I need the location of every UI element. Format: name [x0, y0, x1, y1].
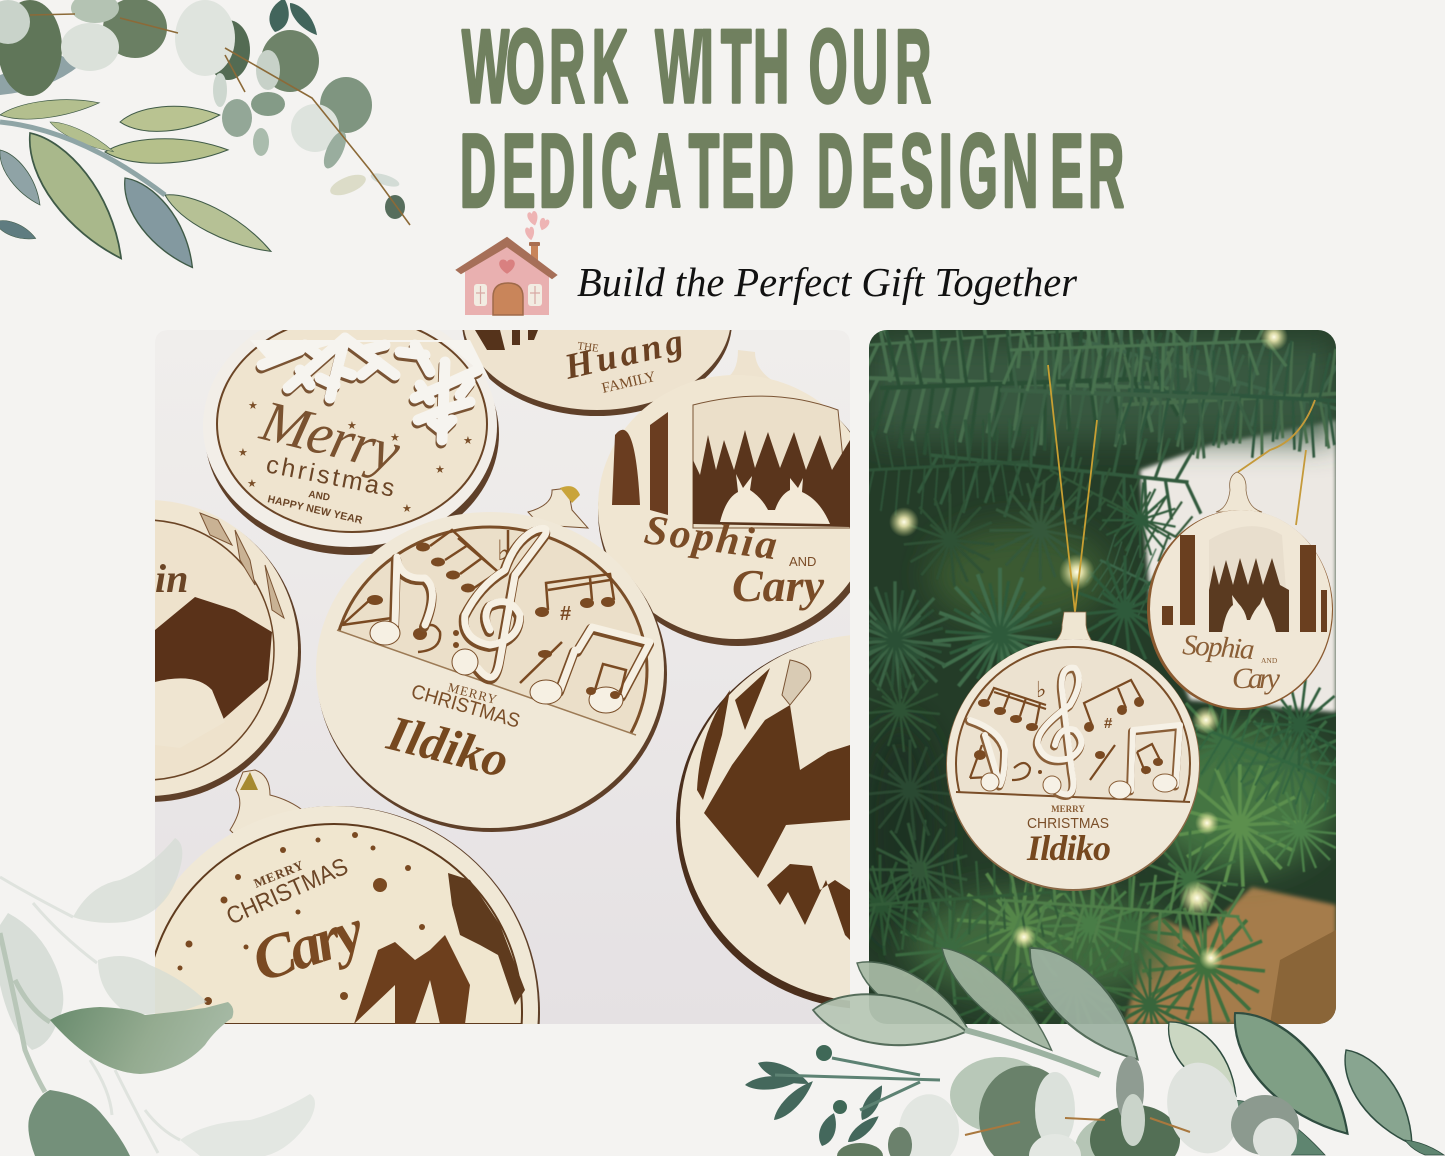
watercolor foliage: bottom-left corner [0, 838, 315, 1156]
window with forest scene [693, 396, 850, 528]
ornament: Sophia and Cary rabbits [598, 350, 878, 646]
stars: ★ [390, 431, 400, 444]
ornament: mountain and bear, left edge [155, 500, 301, 802]
ornament: Ildiko music notes, centre [316, 486, 667, 832]
ornament: Merry Christmas Cary mountains: MERRY [252, 857, 306, 891]
blurred tree depth [860, 340, 1336, 1000]
ornament: Ildiko music notes, centre: ♭ [497, 534, 510, 567]
ornament: Ildiko on tree: MERRY [1051, 804, 1085, 814]
ornament: Ildiko music notes, centre: Ildiko [381, 704, 514, 788]
engraved text: MERRY [446, 679, 499, 707]
photo: ornaments hanging on a Christmas tree [869, 330, 1336, 1024]
ornament: Sophia and Cary on tree [1147, 400, 1333, 710]
stars: ★ [402, 502, 412, 515]
title [460, 9, 1124, 229]
icon: pink house with hearts [457, 210, 556, 315]
ornament: Ildiko on tree: ♭ [1036, 678, 1046, 703]
tree branches and needles [869, 330, 1336, 1024]
watercolor foliage: top-left corner [0, 0, 410, 278]
ornament: Sophia and Cary on tree: Cary [1232, 662, 1281, 695]
ornament: Sophia and Cary on tree: AND [1261, 656, 1278, 665]
ornament: Sophia and Cary rabbits: AND [789, 554, 816, 569]
stars: ★ [463, 434, 473, 447]
dark green leaf [50, 1002, 233, 1074]
background wall and cardboard box [1125, 420, 1336, 1024]
ornament: deer in the forest, right edge [676, 635, 850, 1008]
photo: assorted wooden ornaments on a marble table [155, 330, 850, 1024]
recessed upper panel [338, 526, 648, 733]
ornament: Ildiko on tree: Ildiko [1026, 828, 1111, 868]
ornament: Ildiko on tree: CHRISTMAS [1027, 815, 1109, 832]
watercolor foliage: bottom-right corner [744, 930, 1444, 1156]
ornament: Merry Christmas Cary mountains: Cary [244, 896, 372, 995]
ornament: Merry Christmas snowflake [206, 330, 499, 555]
raised clef and big notes [969, 668, 1180, 796]
stars [238, 399, 473, 515]
ornament: Merry Christmas snowflake: HAPPY NEW YEAR [266, 493, 364, 527]
ornament: The Huang Family: Huang [560, 321, 687, 387]
ornament: The Huang Family [462, 330, 732, 416]
recessed panel [955, 646, 1191, 801]
ornament: Sophia and Cary rabbits: Sophia [642, 507, 779, 569]
ornament: The Huang Family: THE [577, 340, 600, 355]
stars: ★ [238, 446, 248, 459]
ornament: Ildiko on tree [946, 365, 1200, 891]
ornament: Sophia and Cary rabbits: Cary [732, 560, 825, 611]
engraved notes [342, 530, 614, 683]
ornament: Merry Christmas snowflake: Merry [254, 387, 407, 485]
stars: ★ [435, 463, 445, 476]
ornament: Ildiko music notes, centre: CHRISTMAS [409, 681, 522, 733]
title line one: WORK WITH OUR [462, 9, 931, 125]
string lights [889, 323, 1288, 970]
ornament: Ildiko music notes, centre: # [560, 603, 571, 625]
eucalyptus leaves [0, 0, 410, 225]
ornament: mountain and bear, left edge: in [155, 556, 188, 601]
ornament: The Huang Family: FAMILY [600, 369, 658, 397]
subtitle: Build the Perfect Gift Together [577, 259, 1078, 305]
stars: ★ [347, 419, 357, 432]
ornament: Merry Christmas Cary mountains: CHRISTMAS [222, 853, 352, 930]
stars: ★ [247, 477, 257, 490]
ornament: Merry Christmas Cary mountains [130, 770, 540, 1024]
ornament: Ildiko on tree: # [1104, 715, 1113, 732]
ornament: Sophia and Cary on tree: Sophia [1182, 629, 1256, 666]
engraved notes [970, 680, 1160, 780]
ornament: Merry Christmas snowflake: AND [307, 489, 331, 504]
title line two: DEDICATED DESIGNER [460, 113, 1124, 229]
ornament: Merry Christmas snowflake: christmas [264, 450, 397, 503]
stars: ★ [248, 399, 258, 412]
snowflakes [261, 338, 478, 443]
raised clef and big notes [394, 528, 650, 697]
